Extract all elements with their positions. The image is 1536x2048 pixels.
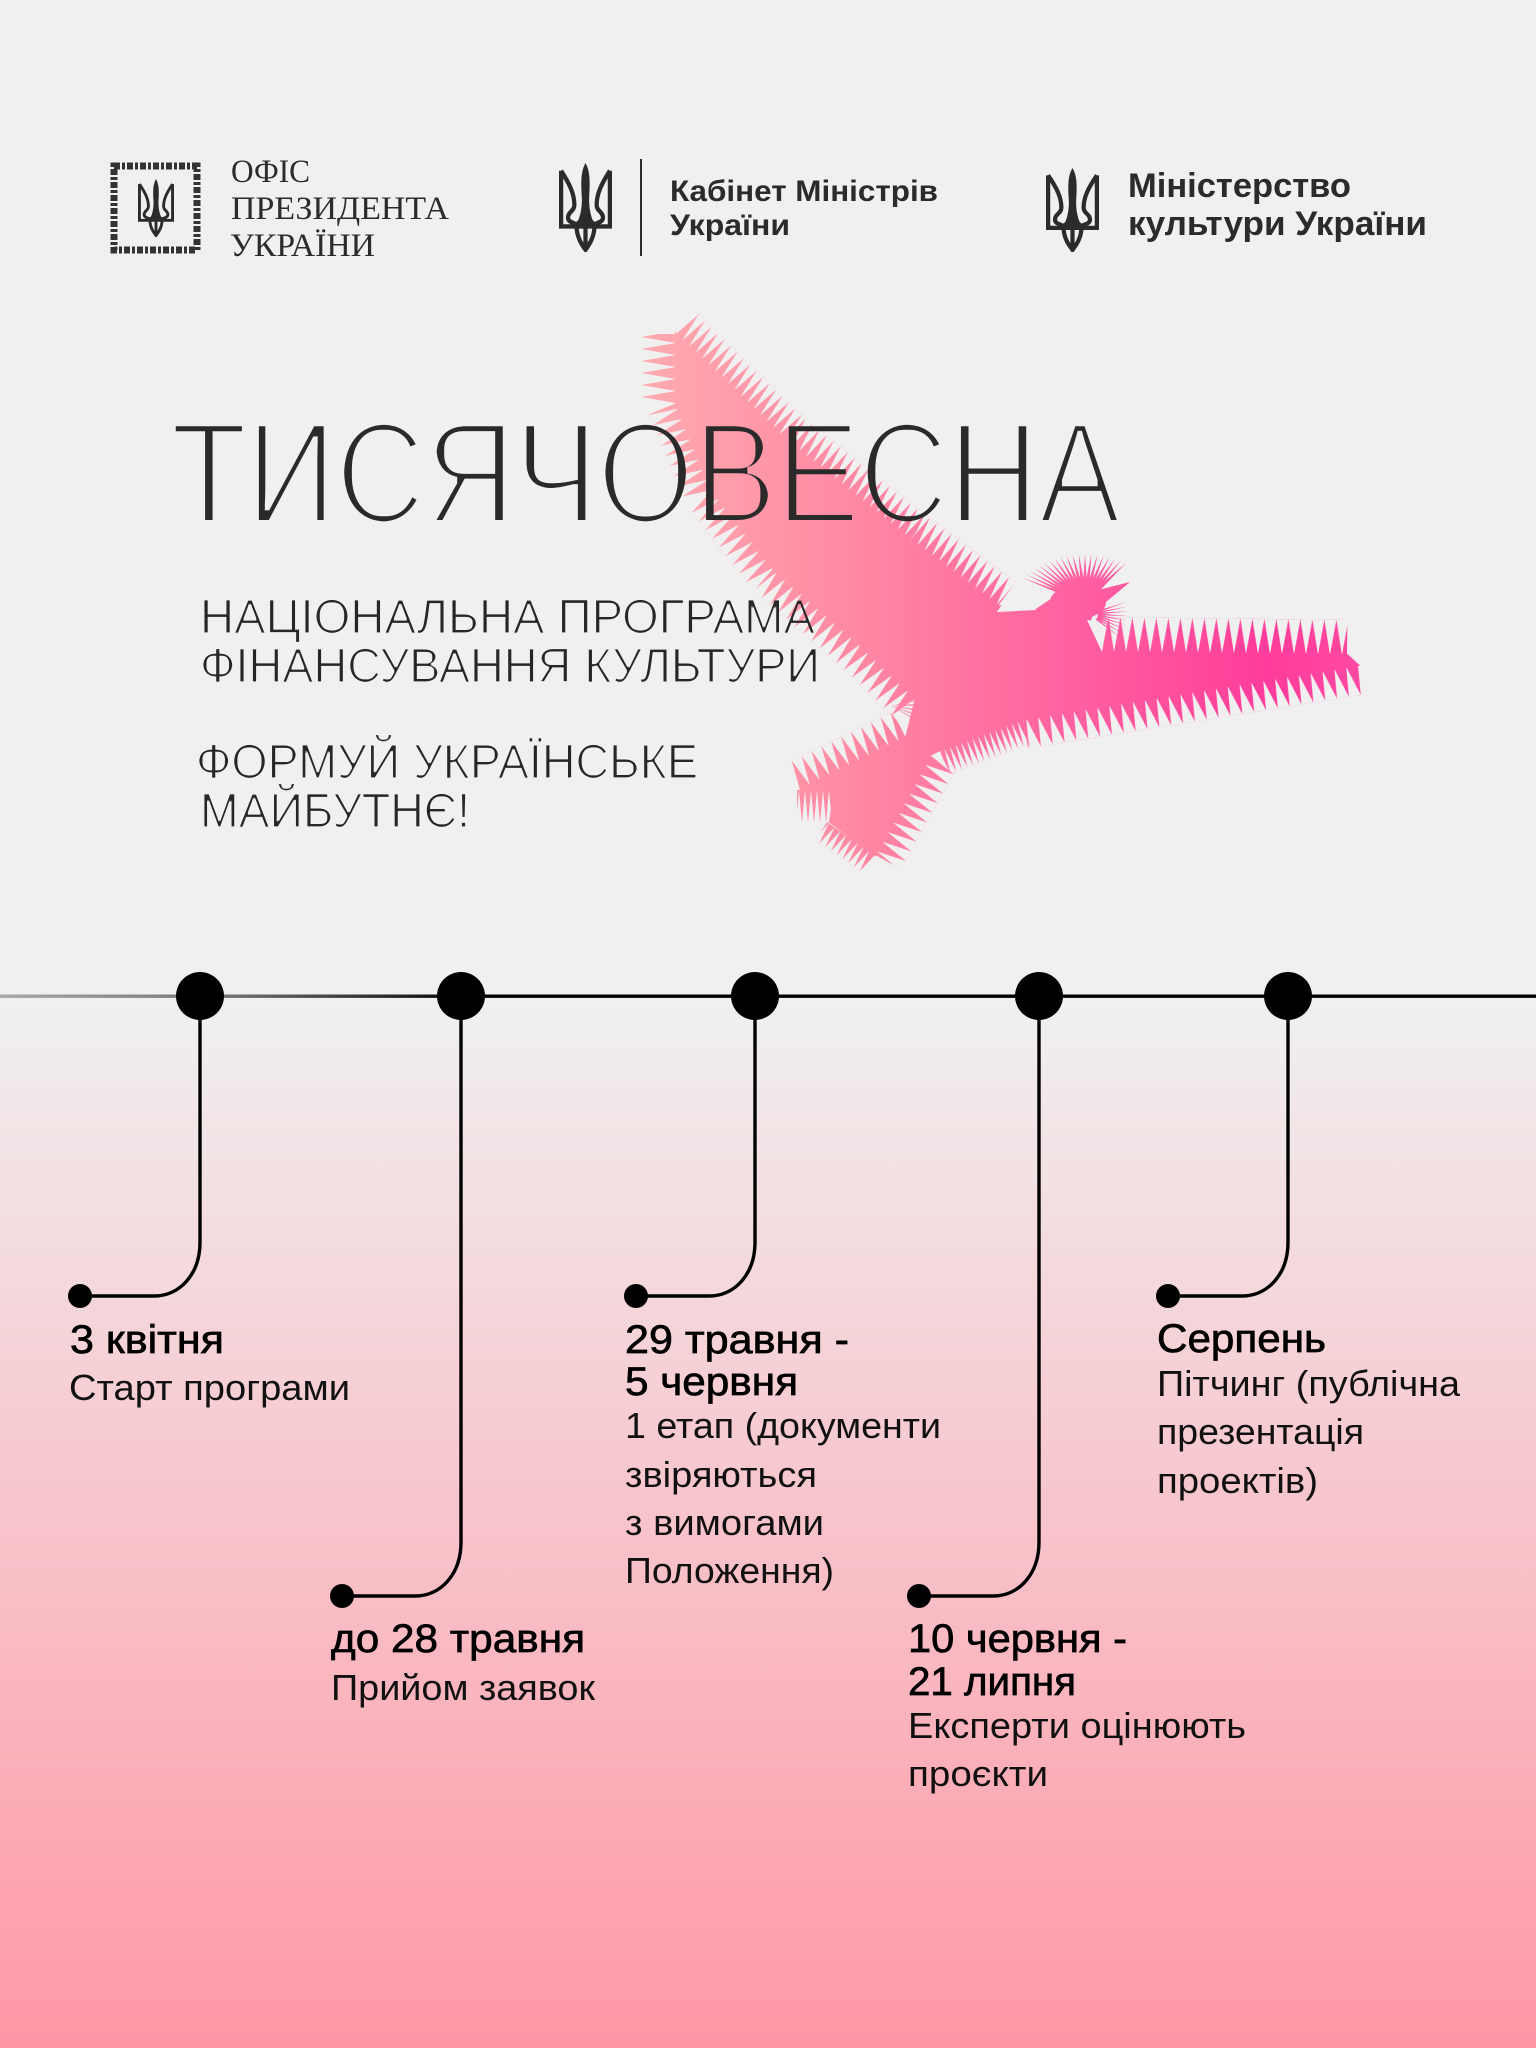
- connector: [624, 972, 779, 1308]
- description: з вимогами: [625, 1502, 824, 1543]
- logo text: Офіс Президента України: [230, 154, 449, 264]
- icon: trident: [561, 163, 610, 250]
- illustration: spiky pink bird: [642, 312, 1363, 873]
- subtitle: [200, 591, 820, 693]
- divider: [640, 159, 642, 256]
- title: ТИСЯЧОВЕСНА: [171, 392, 1121, 554]
- description: 1 етап (документи: [625, 1405, 941, 1446]
- logo: Cabinet of Ministers: [561, 159, 938, 256]
- milestone: 3 квітня: [68, 972, 350, 1408]
- date: 3 квітня: [70, 1318, 224, 1362]
- connector: [330, 972, 485, 1608]
- description: звіряються: [625, 1454, 817, 1495]
- slogan: [196, 734, 698, 838]
- subtitle: НАЦІОНАЛЬНА ПРОГРАМА: [200, 591, 815, 644]
- logo text: Кабінет Міністрів України: [670, 175, 938, 242]
- description: Пітчинг (публічна: [1157, 1363, 1461, 1404]
- description: Положення): [625, 1550, 834, 1591]
- date: 5 червня: [625, 1360, 798, 1404]
- icon: ornamental frame with trident: [114, 166, 197, 250]
- logo text: Офіс Президента України: ОФІС: [231, 154, 310, 190]
- logo text: Міністерство культури України: [1128, 167, 1427, 243]
- milestone: до 28 травня: [330, 972, 595, 1708]
- connector: [907, 972, 1063, 1608]
- logo text: Кабінет Міністрів України: України: [670, 209, 790, 242]
- date: [625, 1318, 849, 1404]
- subtitle: ФІНАНСУВАННЯ КУЛЬТУРИ: [200, 640, 820, 693]
- description: проектів): [1157, 1460, 1318, 1501]
- description: Експерти оцінюють: [908, 1705, 1246, 1746]
- logo: Ministry of Culture: [1048, 167, 1427, 250]
- connector: [1156, 972, 1312, 1308]
- description: [908, 1705, 1246, 1794]
- logo text: Міністерство культури України: культури України: [1128, 205, 1427, 243]
- date: 10 червня -: [908, 1617, 1127, 1661]
- logo text: Кабінет Міністрів України: Кабінет Міністрів: [670, 175, 938, 208]
- date: [908, 1617, 1127, 1704]
- slogan: ФОРМУЙ УКРАЇНСЬКЕ: [196, 734, 698, 789]
- connector: [68, 972, 224, 1308]
- date: Серпень: [1157, 1317, 1326, 1361]
- subtitle and slogan: [196, 591, 820, 838]
- milestone: 10 червня - 21 липня: [907, 972, 1246, 1794]
- description: презентація: [1157, 1411, 1364, 1452]
- logo: Office of the President: [114, 154, 449, 264]
- icon: trident: [1048, 168, 1097, 250]
- logo text: Офіс Президента України: УКРАЇНИ: [230, 228, 375, 264]
- milestone: 29 травня - 5 червня: [624, 972, 941, 1591]
- date: 21 липня: [908, 1660, 1076, 1704]
- description: [1157, 1363, 1461, 1501]
- logo text: Міністерство культури України: Міністерство: [1128, 167, 1351, 205]
- description: Прийом заявок: [331, 1667, 595, 1708]
- description: [625, 1405, 941, 1591]
- slogan: МАЙБУТНЄ!: [200, 783, 470, 838]
- date: 29 травня -: [625, 1318, 849, 1362]
- milestone: Серпень: [1156, 972, 1461, 1501]
- timeline axis: [0, 994, 1536, 998]
- date: до 28 травня: [331, 1617, 585, 1661]
- description: Старт програми: [69, 1367, 350, 1408]
- description: проєкти: [908, 1753, 1048, 1794]
- logo text: Офіс Президента України: ПРЕЗИДЕНТА: [231, 191, 449, 227]
